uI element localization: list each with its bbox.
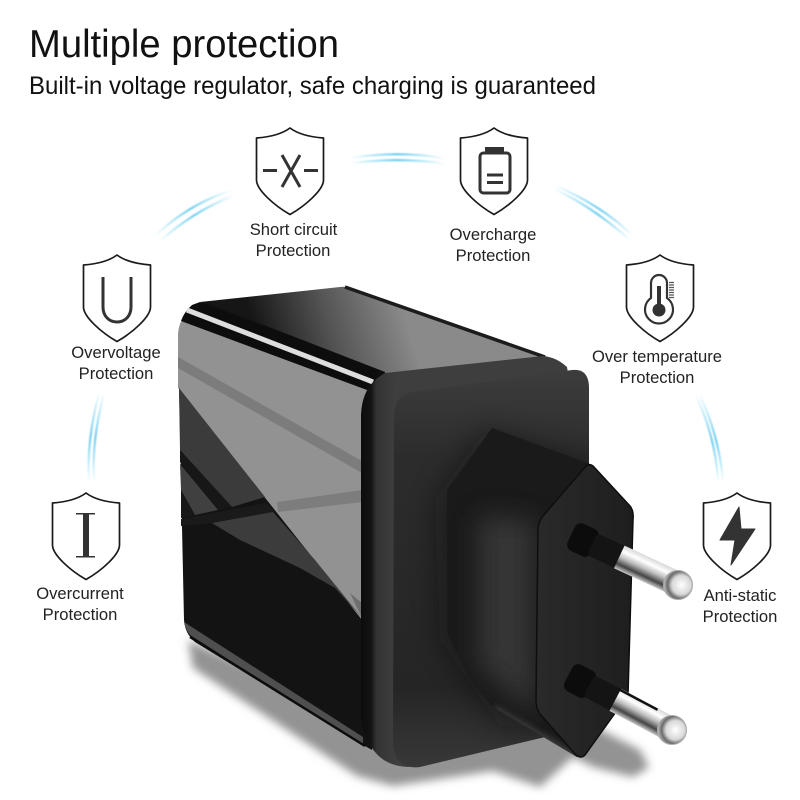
- top face of charger: [200, 287, 545, 378]
- icon and label: overcharge: [450, 128, 536, 265]
- connecting arc: overvoltage to short circuit: [156, 191, 233, 242]
- icon and label: overcurrent: Protection: [43, 605, 117, 624]
- front plate: [393, 370, 589, 767]
- plug base: [447, 428, 590, 757]
- icon and label: short circuit: Short circuit: [250, 220, 338, 239]
- top edge highlight stripe: [181, 302, 385, 390]
- icon and label: overcharge: Overcharge: [450, 225, 536, 244]
- icon and label: over temperature: [592, 255, 722, 387]
- subtitle: Built-in voltage regulator, safe charging is guaranteed: [29, 73, 596, 100]
- connecting arc: over temperature to anti-static: [696, 396, 723, 480]
- icon and label: overvoltage: [71, 255, 161, 383]
- drop shadow: [188, 640, 649, 787]
- icon and label: overvoltage: Overvoltage: [71, 343, 161, 362]
- dark reflections on side face: [179, 388, 362, 618]
- icon and label: short circuit: [250, 128, 338, 260]
- bottom lip of side face: [184, 622, 363, 745]
- icon and label: overcharge: Protection: [456, 246, 530, 265]
- lower pin: [561, 662, 686, 744]
- front frame: [361, 356, 590, 767]
- side face gloss reflection: [178, 320, 368, 620]
- plug face: [536, 465, 633, 757]
- title: Multiple protection: [29, 23, 339, 66]
- icon and label: short circuit: Protection: [256, 241, 330, 260]
- top face far edge: [345, 287, 545, 357]
- side face black body: [178, 302, 385, 750]
- connecting arc: short circuit to overcharge: [350, 154, 443, 164]
- connecting arc: overcharge to over temperature: [556, 186, 630, 238]
- plate shadow around plug: [434, 432, 578, 732]
- icon and label: overcurrent: Overcurrent: [36, 584, 124, 603]
- icon and label: overvoltage: Protection: [79, 364, 153, 383]
- charger product illustration: [178, 287, 692, 787]
- reflected bands on side face: [178, 357, 362, 512]
- icon and label: over temperature: Over temperature: [592, 347, 722, 366]
- icon and label: anti-static: Protection: [703, 607, 777, 626]
- icon and label: overcurrent: [36, 493, 124, 624]
- icon and label: anti-static: [703, 493, 777, 626]
- icon and label: over temperature: Protection: [620, 368, 694, 387]
- connecting arc: overcurrent to overvoltage: [89, 393, 104, 480]
- upper pin: [565, 521, 692, 600]
- icon and label: anti-static: Anti-static: [704, 586, 776, 605]
